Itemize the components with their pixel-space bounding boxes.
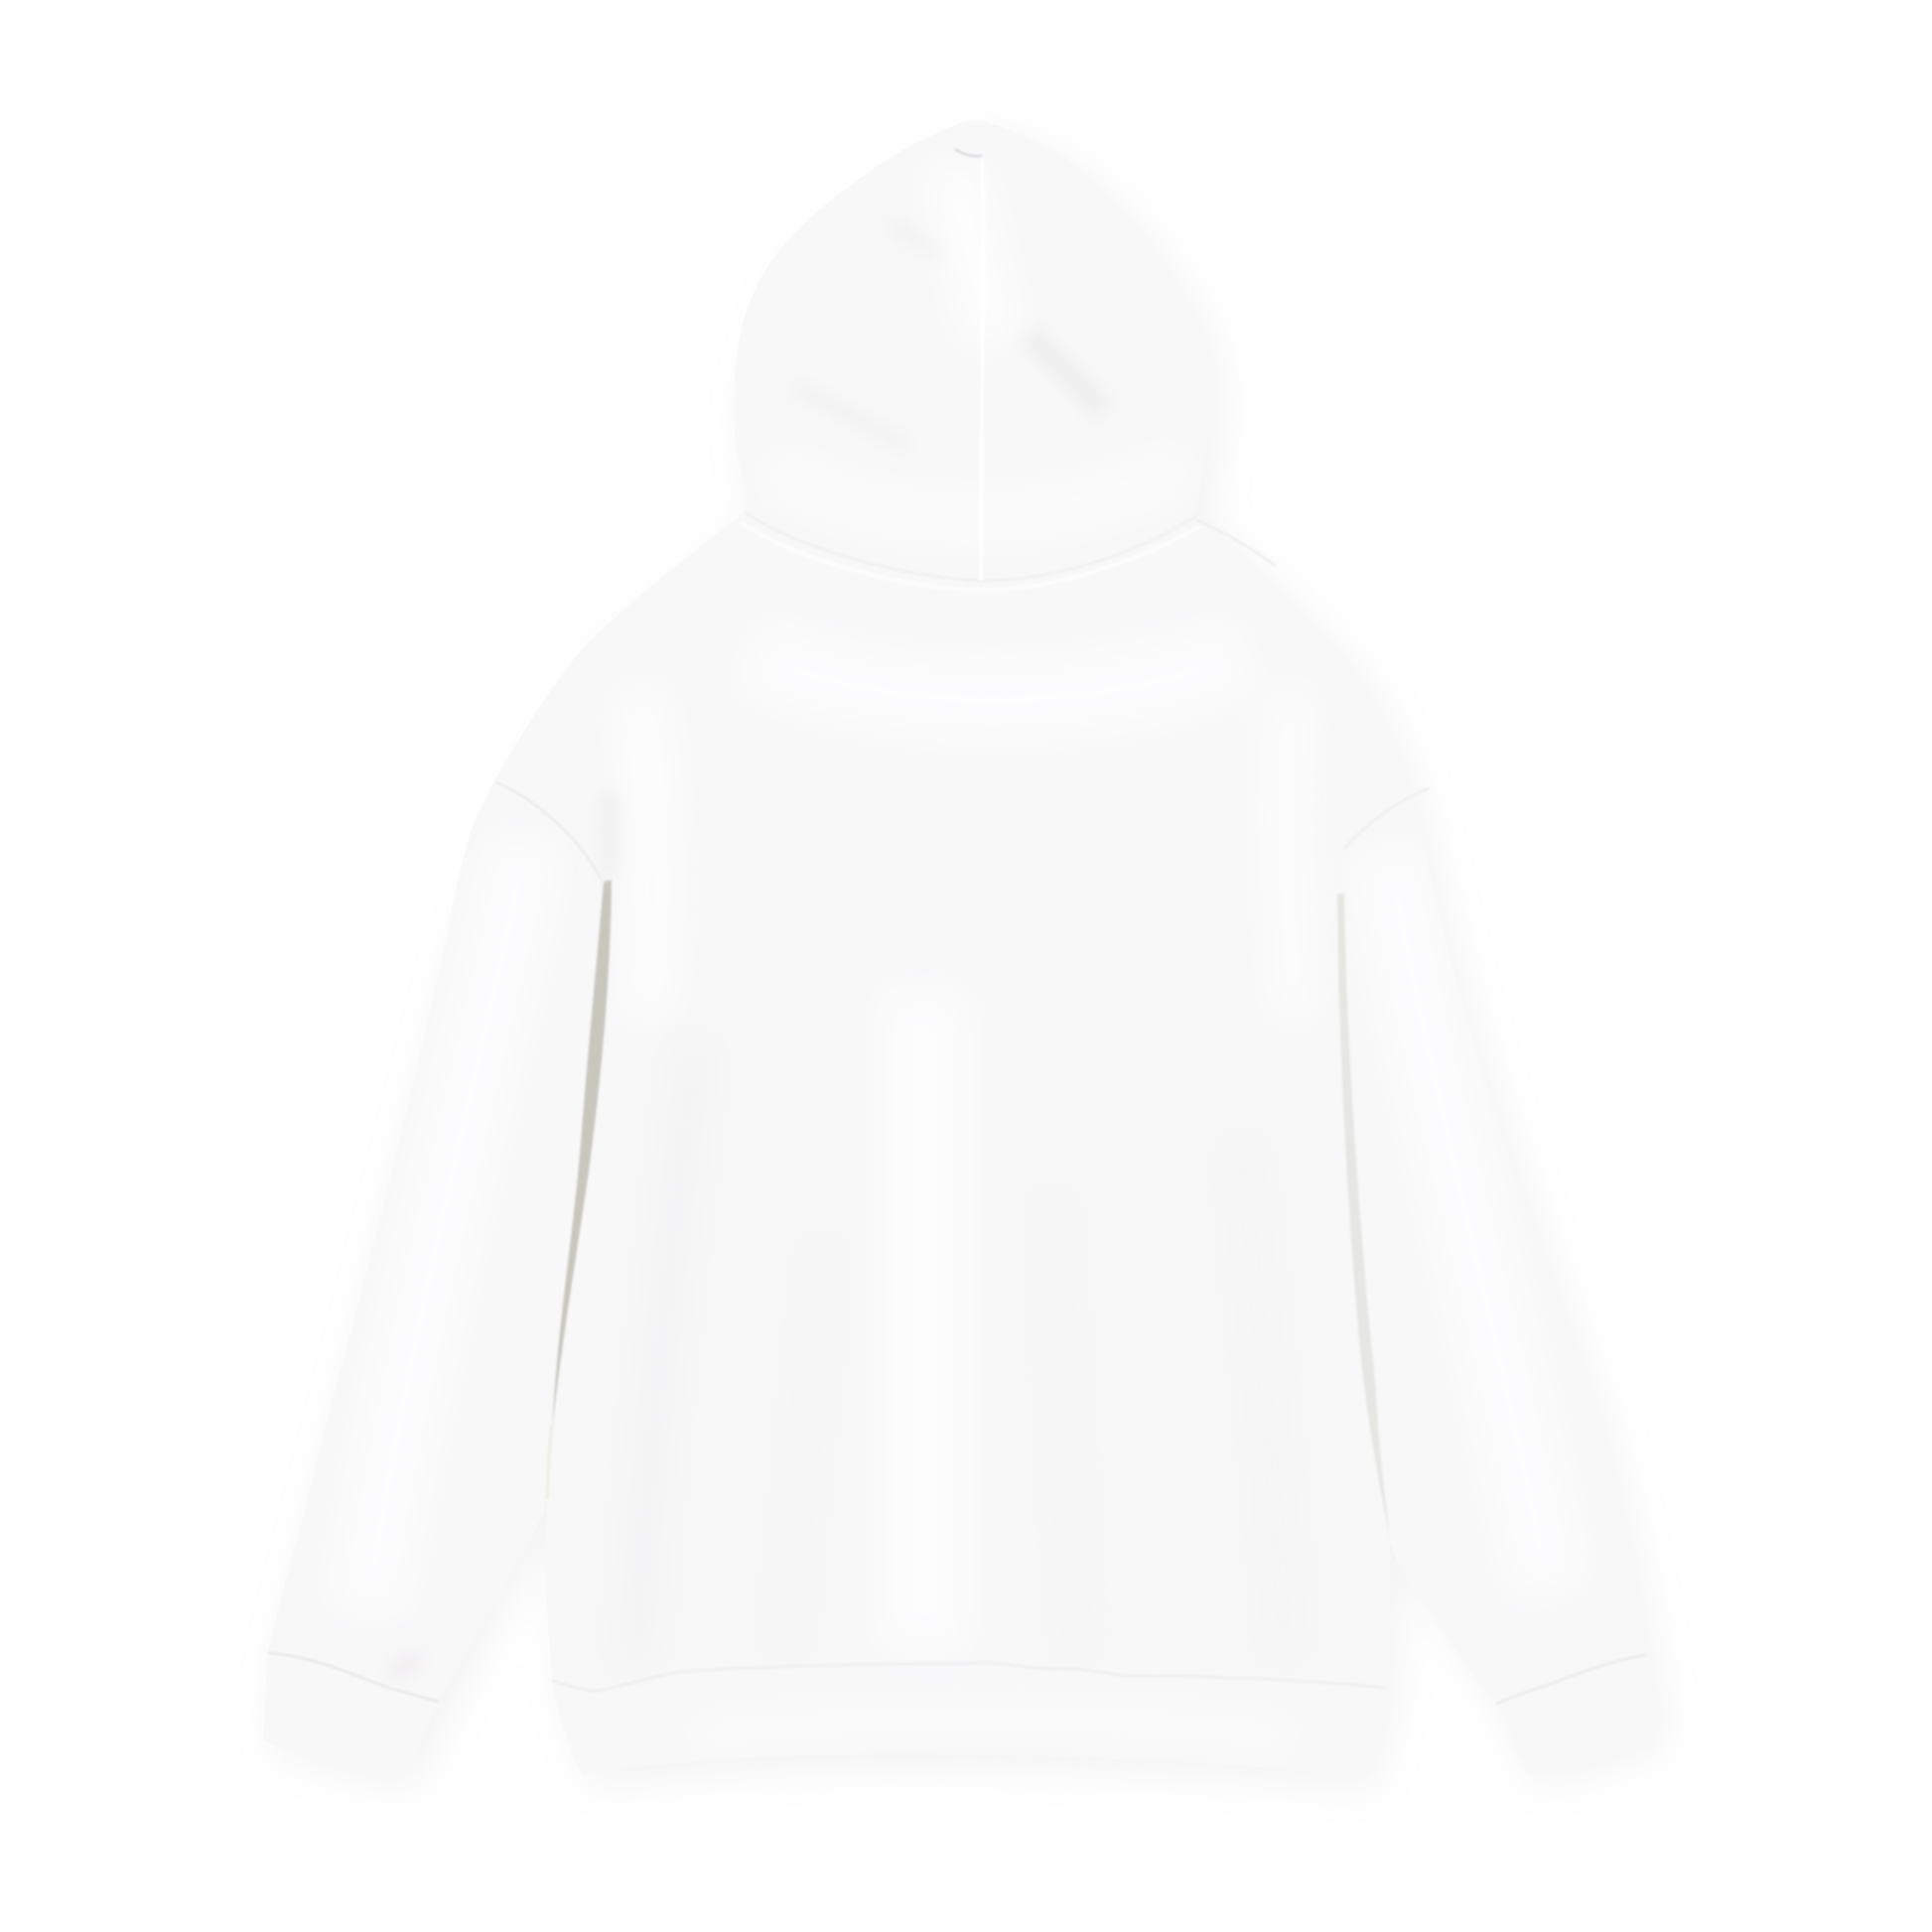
fabric shading: [1036, 343, 1094, 401]
hem rib seam: [552, 1663, 1385, 1691]
right shoulder seam: [1343, 788, 1430, 850]
hood centre seam: [981, 159, 983, 581]
seams: [268, 149, 1646, 1704]
hoodie silhouette: [263, 120, 1658, 1779]
illustration: white hoodie back view: [268, 147, 1648, 1775]
left underarm gap: [547, 794, 615, 1499]
right cuff seam: [1496, 1655, 1646, 1704]
right collar stitch: [1196, 520, 1276, 566]
right underarm gap: [1337, 894, 1390, 1539]
left shoulder seam: [496, 782, 603, 882]
hood tip stitch: [955, 149, 982, 156]
torso soft folds: [635, 1042, 1286, 1668]
hood shading: [1036, 343, 1094, 401]
soft drop shadow: [273, 132, 1668, 1791]
neck seam: [745, 512, 1196, 581]
left cuff seam: [268, 1653, 439, 1702]
neck binding highlight: [740, 522, 1201, 590]
broad highlights: [367, 169, 1549, 1737]
left cuff crease: [384, 1649, 426, 1683]
